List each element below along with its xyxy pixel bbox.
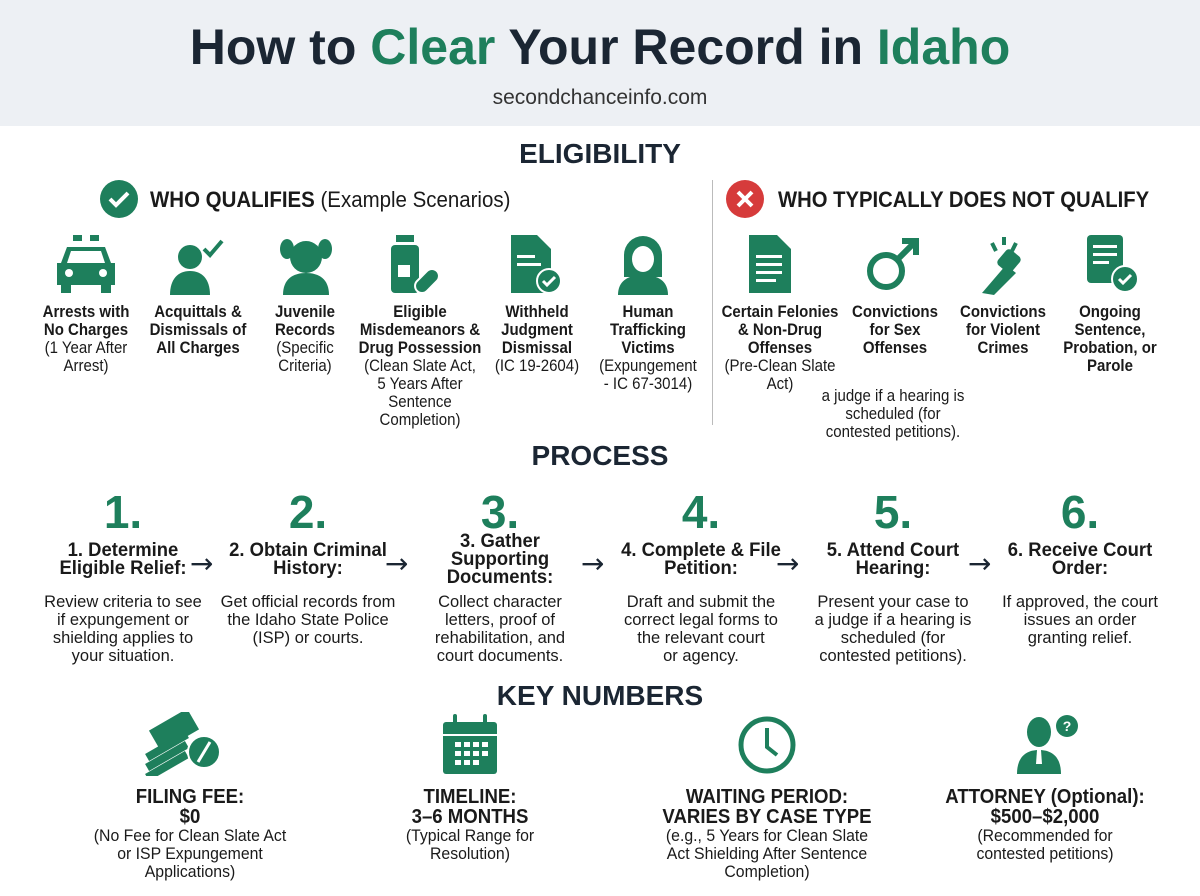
label: trafficking [599,303,697,393]
step 6: Order: [1052,558,1108,579]
icon: pills [391,235,438,293]
arrow: → [968,547,991,580]
step 3: rehabilitation, and [435,628,565,647]
label: trafficking: (Expungement [599,357,697,375]
step 1: 1. [104,486,142,538]
stray text: scheduled (for [845,405,941,423]
key: waiting period: Completion) [724,862,810,881]
key: waiting period: (e.g., 5 Years for Clean Slate [666,826,868,845]
key: attorney: ATTORNEY (Optional): [945,786,1145,808]
step 1: 1. Determine [68,540,178,561]
label: sex offenses [852,303,938,357]
step 2: Get official records from [221,592,395,611]
key: filing fee: or ISP Expungement [117,844,263,863]
step 5: 5. [874,486,912,538]
step 5: scheduled (for [841,628,945,647]
label: arrests [43,303,129,375]
step 1: shielding applies to [53,628,193,647]
label: trafficking: Victims [621,339,675,357]
label: misdemeanors: Misdemeanors & [360,321,480,339]
key: timeline: 3–6 MONTHS [412,806,528,828]
step 3 [435,486,565,665]
icon: fist [982,237,1021,295]
step 3: 3. Gather [460,531,540,552]
stray text [822,387,964,441]
stray text: contested petitions). [826,423,960,441]
label: ongoing: Ongoing [1079,303,1141,321]
key: waiting period: Act Shielding After Sentence [667,844,867,863]
step 2: the Idaho State Police [227,610,389,629]
stray text: a judge if a hearing is [822,387,964,405]
step 6 [1002,486,1158,647]
key: timeline: TIMELINE: [424,786,516,808]
heading: process: PROCESS [532,440,668,471]
label: sex offenses: Offenses [863,339,927,357]
label: acquittals [150,303,246,357]
label: ongoing: Parole [1087,357,1133,375]
step 4: 4. [682,486,720,538]
step 5: a judge if a hearing is [815,610,971,629]
step 1 [44,486,202,665]
step 3: 3. [481,486,519,538]
label: ongoing: Probation, or [1063,339,1157,357]
label: felonies [722,303,838,393]
step 1: your situation. [72,646,174,665]
label: felonies: Act) [767,375,793,393]
step 1: if expungement or [57,610,189,629]
label: violent: Crimes [978,339,1028,357]
step 6: If approved, the court [1002,592,1158,611]
key: filing fee: FILING FEE: [136,786,244,808]
label: felonies: (Pre-Clean Slate [724,357,835,375]
not qualify header: WHO TYPICALLY DOES NOT QUALIFY [778,187,1149,212]
label: sex offenses: for Sex [870,321,920,339]
label: arrests: Arrests with [43,303,129,321]
icon: child [280,239,332,295]
key: attorney [945,715,1145,863]
step 1: Eligible Relief: [59,558,186,579]
icon: felony doc [749,235,791,293]
label: felonies: Offenses [748,339,812,357]
label: acquittals: Dismissals of [150,321,246,339]
label: misdemeanors: Completion) [380,411,460,429]
label: acquittals: Acquittals & [154,303,242,321]
step 4: 4. Complete & File [621,540,781,561]
step 5: 5. Attend Court [827,540,959,561]
step 2: 2. Obtain Criminal [229,540,387,561]
key: attorney: contested petitions) [976,844,1114,863]
label: juvenile: (Specific [276,339,334,357]
label: ongoing [1063,303,1157,375]
label: arrests: Arrest) [63,357,109,375]
key: attorney: ? [1063,718,1071,734]
heading: key numbers: KEY NUMBERS [497,680,703,711]
step 5: contested petitions). [819,646,967,665]
label: felonies: & Non-Drug [738,321,822,339]
divider [712,180,713,425]
label: withheld: Dismissal [502,339,572,357]
step 2: 2. [289,486,327,538]
arrow: → [190,547,213,580]
key: filing fee [94,712,286,881]
step 4 [621,486,781,665]
label: violent: for Violent [966,321,1040,339]
label: sex offenses: Convictions [852,303,938,321]
key: timeline: Resolution) [430,844,510,863]
step 3: letters, proof of [445,610,555,629]
url: secondchanceinfo.com [493,86,707,109]
label: withheld [495,303,579,375]
qualifies header: WHO QUALIFIES (Example Scenarios) [150,187,510,212]
key: filing fee: Applications) [145,862,235,881]
heading: eligibility: ELIGIBILITY [519,138,681,169]
header band [0,0,1200,126]
label: juvenile: Records [275,321,335,339]
step 4: the relevant court [637,628,765,647]
step 3: court documents. [437,646,563,665]
label: arrests: No Charges [44,321,128,339]
key: attorney: $500–$2,000 [991,806,1099,828]
step 6: issues an order [1024,610,1136,629]
step 2 [221,486,395,647]
arrow: → [385,547,408,580]
icon: document check [511,235,560,293]
icon: male symbol [867,238,919,290]
key: filing fee: $0 [180,806,200,828]
arrow: → [776,547,799,580]
label: juvenile: Juvenile [275,303,335,321]
label: trafficking: Trafficking [610,321,686,339]
label: juvenile [275,303,335,375]
step 3: Collect character [438,592,562,611]
key: filing fee: (No Fee for Clean Slate Act [94,826,286,845]
label: arrests: (1 Year After [45,339,127,357]
icon: document check 2 [1087,235,1137,291]
step 3: Documents: [447,567,553,588]
key: timeline [406,714,534,863]
step 3: Supporting [451,549,549,570]
label: juvenile: Criteria) [278,357,332,375]
step 6: granting relief. [1028,628,1132,647]
label: violent: Convictions [960,303,1046,321]
step 5 [815,486,971,665]
label: trafficking: - IC 67-3014) [604,375,692,393]
key: timeline: (Typical Range for [406,826,534,845]
key: waiting period: WAITING PERIOD: [686,786,848,808]
step 4: Draft and submit the [627,592,775,611]
arrow: → [581,547,604,580]
step 1: Review criteria to see [44,592,202,611]
step 2: History: [273,558,343,579]
label: acquittals: All Charges [156,339,240,357]
title: How to Clear Your Record in Idaho [190,19,1010,75]
key: waiting period [662,716,872,881]
label: felonies: Certain Felonies [722,303,838,321]
key: waiting period: VARIES BY CASE TYPE [662,806,872,828]
label: withheld: Judgment [501,321,573,339]
step 6: 6. Receive Court [1008,540,1152,561]
label: misdemeanors: Drug Possession [359,339,481,357]
step 6: 6. [1061,486,1099,538]
label: misdemeanors [359,303,481,429]
label: ongoing: Sentence, [1075,321,1145,339]
not qualify header [726,180,1149,218]
label: misdemeanors: Sentence [388,393,452,411]
step 2: (ISP) or courts. [253,628,363,647]
label: trafficking: Human [623,303,673,321]
label: misdemeanors: Eligible [393,303,447,321]
label: misdemeanors: 5 Years After [377,375,463,393]
icon: person check [170,240,224,295]
label: violent [960,303,1046,357]
icon: woman [618,236,668,295]
qualifies header [100,180,510,218]
label: withheld: Withheld [505,303,569,321]
label: misdemeanors: (Clean Slate Act, [364,357,476,375]
label: withheld: (IC 19-2604) [495,357,579,375]
step 5: Hearing: [856,558,930,579]
step 4: Petition: [664,558,738,579]
icon: car [57,235,115,293]
step 4: correct legal forms to [624,610,778,629]
step 5: Present your case to [817,592,969,611]
step 4: or agency. [663,646,739,665]
key: attorney: (Recommended for [977,826,1113,845]
